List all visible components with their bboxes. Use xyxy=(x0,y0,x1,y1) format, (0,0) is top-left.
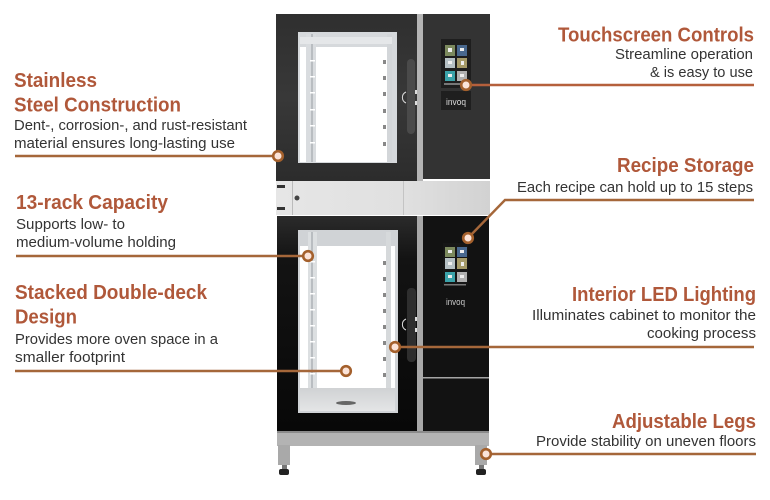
callout: stacked double-deck design: Design xyxy=(15,306,77,328)
oven illustration xyxy=(276,14,490,475)
callout: stainless steel construction xyxy=(14,69,283,161)
upper door handle xyxy=(402,59,416,134)
lower control panel xyxy=(423,216,489,431)
lower logo: invoq xyxy=(446,297,465,308)
upper logo plate: invoq xyxy=(446,97,466,108)
callout: stacked double-deck design: smaller footprint xyxy=(15,349,126,366)
callout: touchscreen controls xyxy=(461,24,754,90)
upper logo plate xyxy=(441,91,471,110)
callout: touchscreen controls: & is easy to use xyxy=(650,64,753,81)
callout: stainless steel construction: material ensures long-lasting use xyxy=(14,135,235,152)
callout: 13-rack capacity: 13-rack Capacity xyxy=(16,191,169,214)
callout: stacked double-deck design: Provides more oven space in a xyxy=(15,331,219,348)
callout: recipe storage: Each recipe can hold up to 15 steps xyxy=(517,179,753,196)
centre divider strip xyxy=(417,14,423,181)
callout: touchscreen controls: Touchscreen Controls xyxy=(558,24,754,46)
lower touchscreen xyxy=(443,243,468,286)
callout: 13-rack capacity: medium-volume holding xyxy=(16,234,176,251)
callout: recipe storage xyxy=(463,154,754,243)
upper oven door xyxy=(276,14,417,181)
callout: adjustable legs xyxy=(481,410,756,459)
lower oven door xyxy=(277,216,417,431)
lower door handle xyxy=(402,288,416,362)
callout: interior led lighting xyxy=(390,283,756,352)
callout: 13-rack capacity xyxy=(16,191,313,261)
stand and legs xyxy=(277,431,489,475)
callout: stainless steel construction: Stainless xyxy=(14,69,97,92)
callout: adjustable legs: Adjustable Legs xyxy=(612,410,756,433)
callout: stacked double-deck design xyxy=(15,281,351,376)
callout: interior led lighting: Illuminates cabinet to monitor the xyxy=(532,307,756,324)
upper oven window and rack xyxy=(298,32,397,163)
callout: touchscreen controls: Streamline operation xyxy=(615,46,753,63)
callout: adjustable legs: Provide stability on uneven floors xyxy=(536,433,756,450)
callout: interior led lighting: Interior LED Lighting xyxy=(572,283,756,306)
upper touchscreen xyxy=(441,39,471,88)
callout: interior led lighting: cooking process xyxy=(647,325,756,342)
lower oven window and rack xyxy=(298,230,398,413)
callout: stainless steel construction: Dent-, corrosion-, and rust-resistant xyxy=(14,117,248,134)
callout: 13-rack capacity: Supports low- to xyxy=(16,216,125,233)
callout: recipe storage: Recipe Storage xyxy=(617,154,754,177)
upper control panel xyxy=(423,14,490,179)
middle band xyxy=(276,181,490,215)
callout: stacked double-deck design: Stacked Double-deck xyxy=(15,281,208,304)
callout: stainless steel construction: Steel Construction xyxy=(14,94,181,116)
